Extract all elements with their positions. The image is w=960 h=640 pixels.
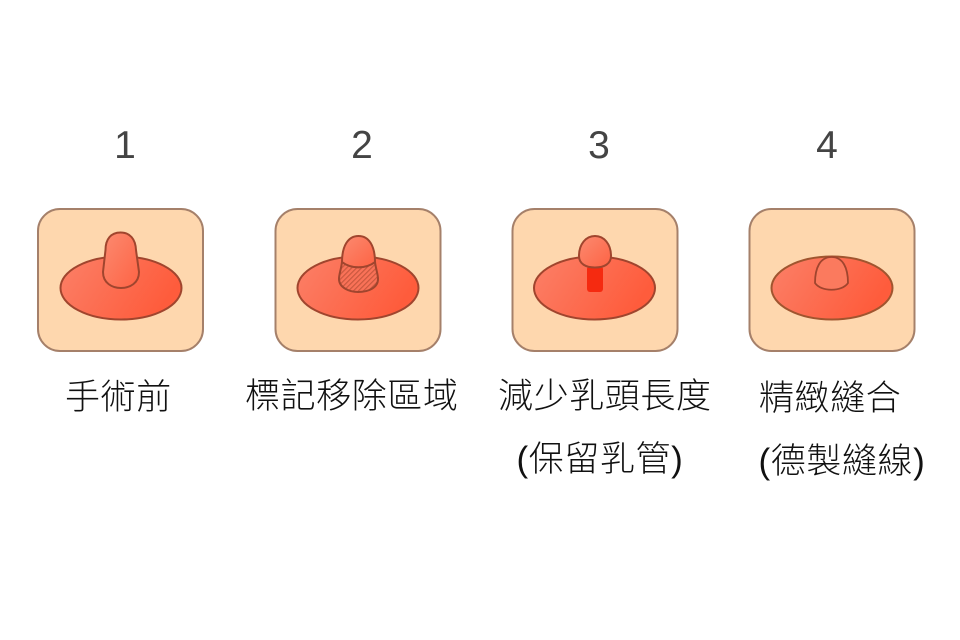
panel 1: before surgery (38, 209, 203, 351)
panel 4: fine suture (750, 209, 914, 351)
step 4 number: 4 (816, 124, 838, 167)
label 3 note: (保留乳管) (516, 440, 683, 479)
label 4 note: (德製縫線) (758, 442, 925, 481)
step 1 number: 1 (114, 124, 136, 167)
label 4: 精緻縫合 (759, 379, 901, 418)
step 3 number: 3 (588, 124, 610, 167)
preserved duct (587, 266, 603, 292)
areola 4 (772, 256, 892, 320)
nipple 3 tip (579, 236, 611, 268)
nipple 2 tip (342, 236, 375, 267)
nipple 1 (103, 232, 139, 288)
areola 2 (298, 256, 418, 320)
panel 3: reduced length (512, 209, 678, 351)
label 3: 減少乳頭長度 (498, 377, 712, 416)
nipple 4 sutured (815, 257, 848, 290)
label 1: 手術前 (65, 378, 172, 417)
areola 1 (60, 256, 182, 320)
label 2: 標記移除區域 (245, 377, 459, 416)
areola 3 (534, 256, 655, 320)
panel 2: mark removal area (276, 209, 440, 351)
nipple 2 hatched removal zone (339, 262, 378, 292)
step 2 number: 2 (351, 124, 373, 167)
